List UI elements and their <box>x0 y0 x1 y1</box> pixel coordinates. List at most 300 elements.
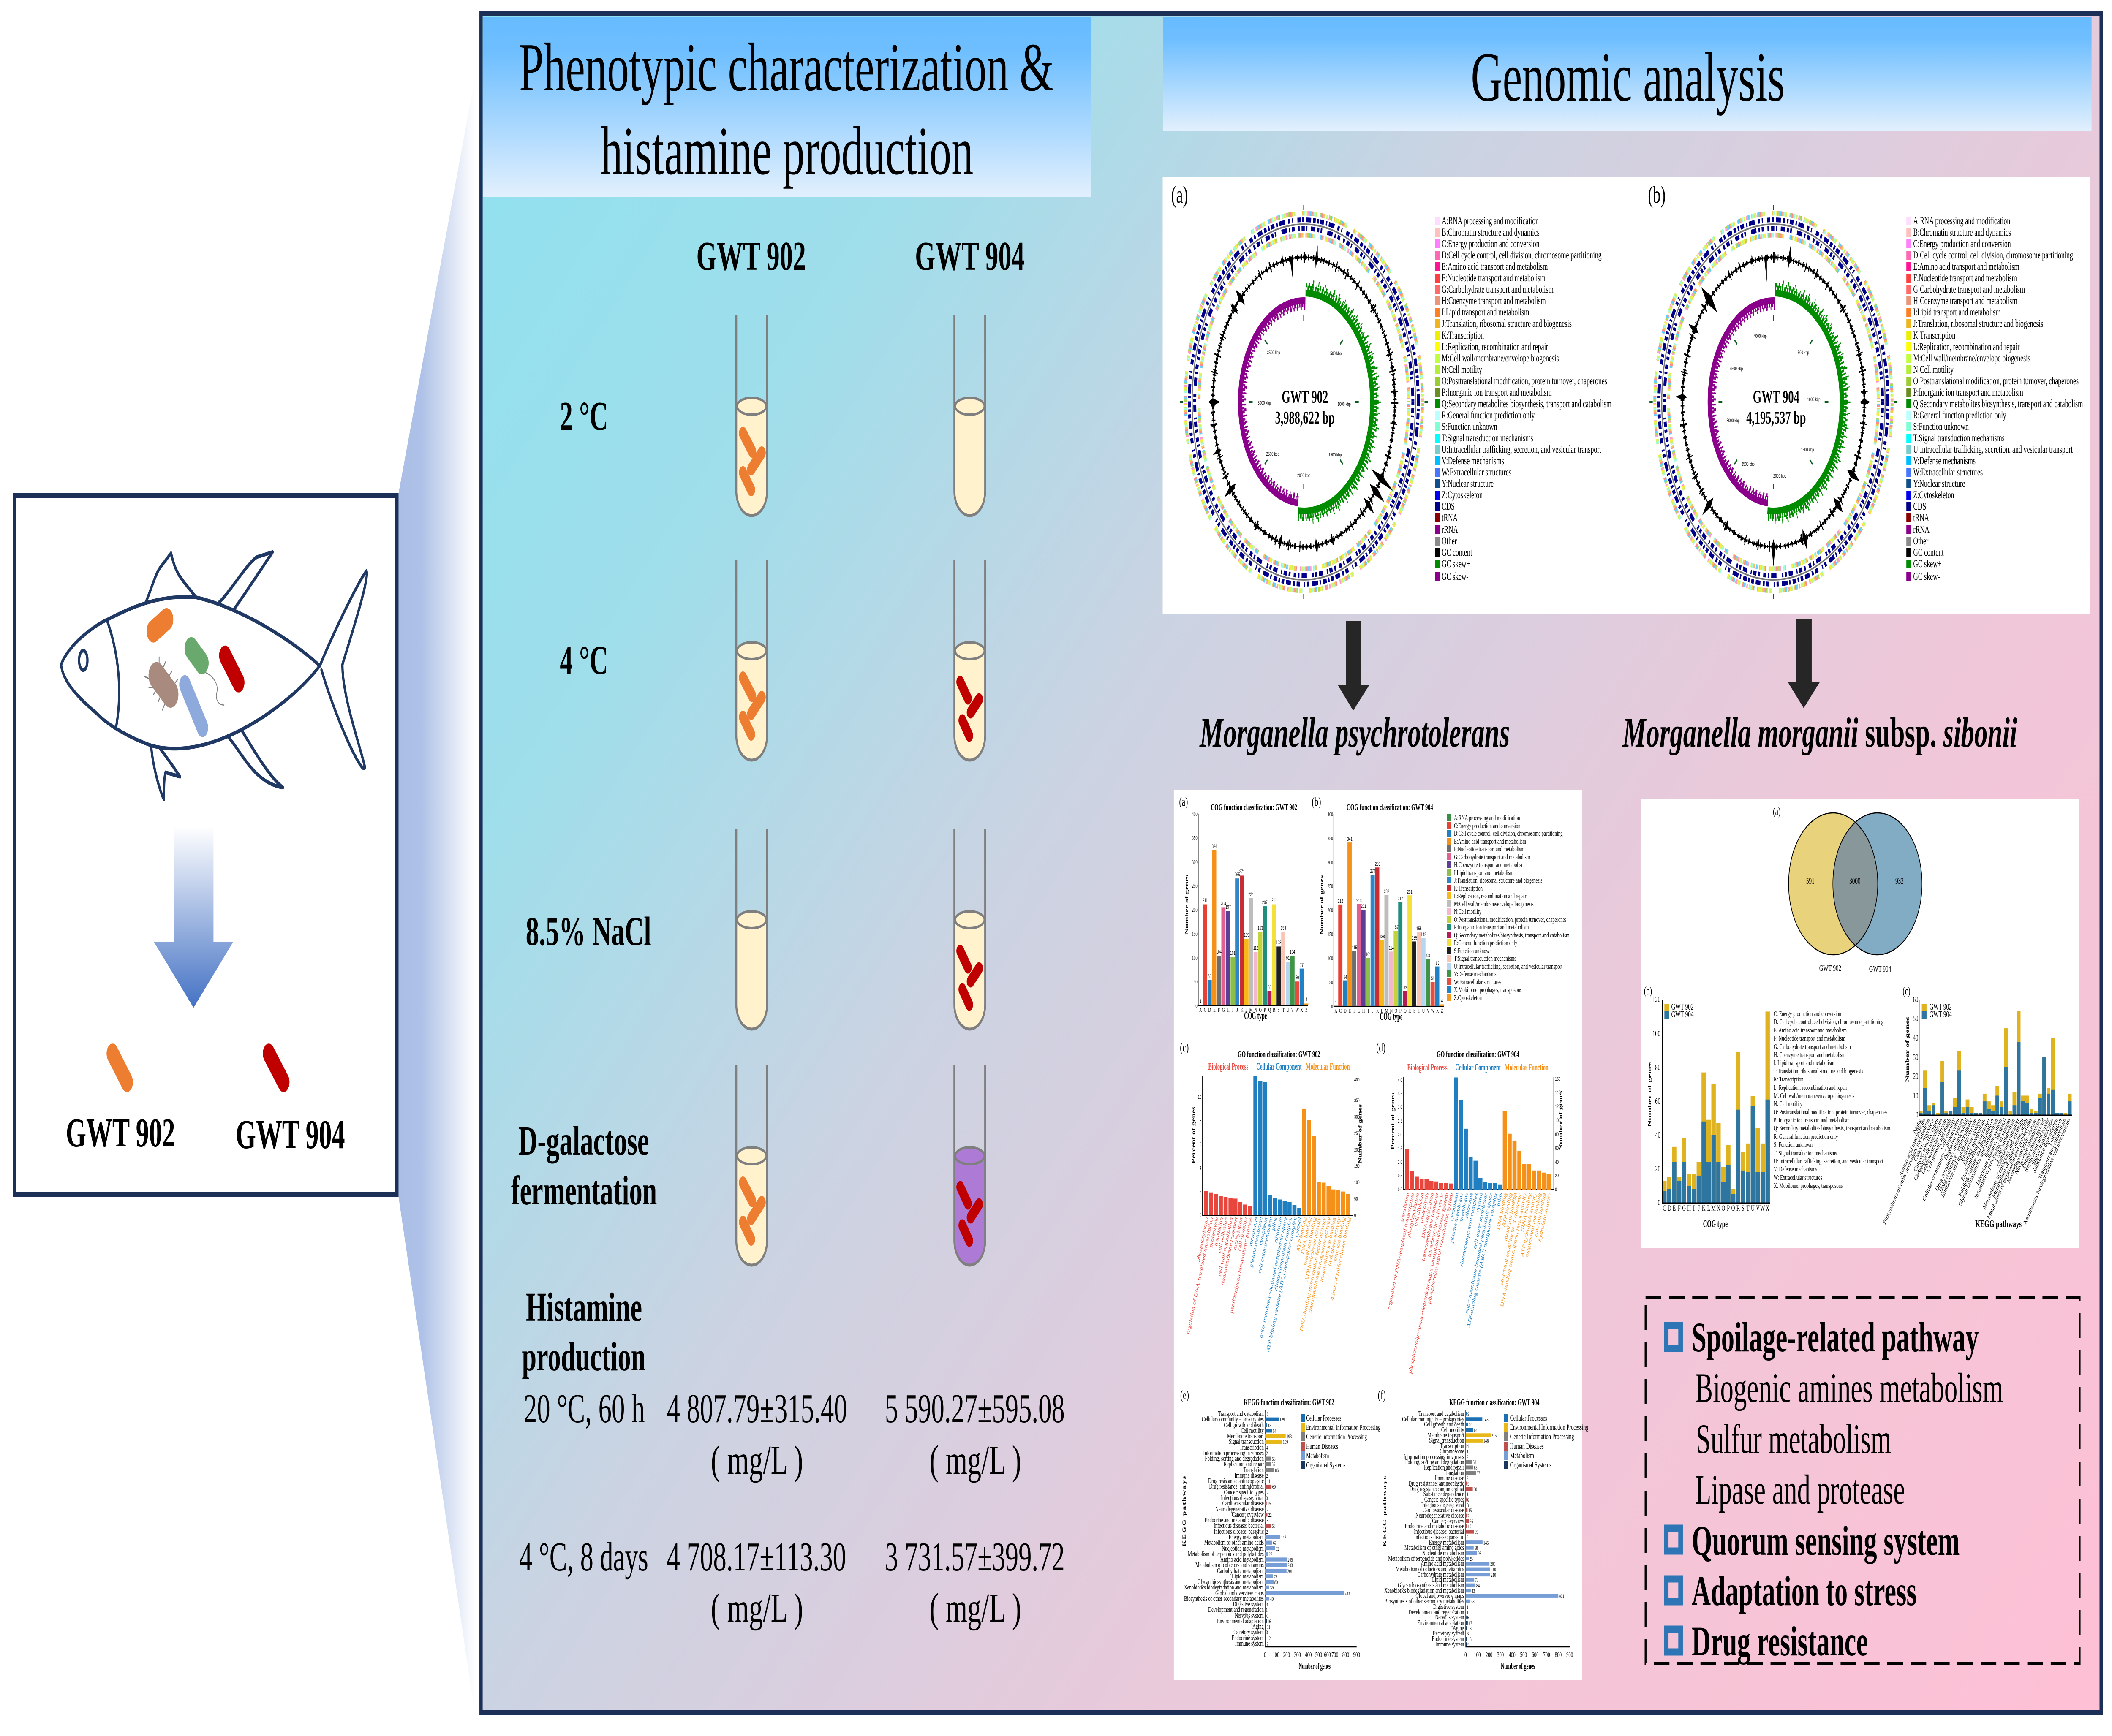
chart d: GO GWT 904: GO function classification: GWT 904 <box>1437 1049 1519 1059</box>
chart a: COG GWT 902: I <box>1232 1007 1233 1013</box>
chart a: COG GWT 902: 204 <box>1221 901 1226 907</box>
row 1 test tubes <box>736 315 985 516</box>
chart f: KEGG GWT 904: 1 <box>1467 1604 1468 1611</box>
chart b: COG GWT 904: X <box>1436 1008 1439 1014</box>
chart: GWT 904 genome circle: GWT 904 <box>1753 387 1799 407</box>
histamine production table: 3 731.57±399.72 <box>885 1534 1065 1580</box>
chart c: KEGG stacked bars: Neurodegenerative disease <box>2006 1117 2037 1185</box>
chart b: COG GWT 904: K <box>1376 1008 1379 1014</box>
chart c: GO GWT 902: 100 <box>1354 1180 1360 1186</box>
chart f: KEGG GWT 904: Genetic Information Processing <box>1510 1432 1574 1441</box>
chart e: KEGG GWT 902: 203 <box>1287 1562 1293 1569</box>
chart f: KEGG GWT 904: Cell motility <box>1441 1426 1464 1434</box>
chart e: KEGG GWT 902: Replication and repair <box>1224 1460 1264 1468</box>
chart c: KEGG stacked bars: Cell growth and death <box>1925 1117 1952 1174</box>
chart b: COG stacked bars: S: Function unknown <box>1774 1141 1813 1149</box>
chart d: GO GWT 904: 2.5 <box>1398 1119 1402 1125</box>
chart d: GO GWT 904: ATP-binding cassette (ABC) transporter complex <box>1466 1192 1498 1329</box>
chart f: KEGG GWT 904: Membrane transport <box>1427 1432 1464 1440</box>
chart f: KEGG GWT 904: Excretory system <box>1433 1630 1464 1638</box>
legend: GWT 902 genome circle: E:Amino acid transport and metabolism <box>1442 260 1548 272</box>
chart: GWT 904 genome circle: 4000 kbp <box>1754 334 1767 340</box>
species label: Morganella morganii subsp. sibonii: Morganella morganii subsp. sibonii <box>1622 710 2017 756</box>
chart d: GO GWT 904: proteolysis <box>1419 1191 1430 1224</box>
chart c: KEGG stacked bars: Cellular community – prokaryotes <box>1921 1116 1961 1203</box>
chart b: COG GWT 904: T <box>1418 1008 1420 1014</box>
chart a: COG GWT 902: N <box>1255 1007 1257 1013</box>
chart a: Venn diagram: 591 <box>1806 876 1815 886</box>
chart f: KEGG GWT 904: 900 <box>1566 1651 1573 1659</box>
chart a: COG GWT 902: 250 <box>1192 883 1198 889</box>
chart f: KEGG GWT 904: Lipid metabolism <box>1432 1576 1464 1584</box>
chart d: GO GWT 904: Number of genes <box>1558 1090 1564 1150</box>
chart d: GO GWT 904: plasma membrane <box>1449 1192 1464 1244</box>
chart a: COG GWT 902: K <box>1241 1007 1244 1013</box>
chart b: COG stacked bars: U: Intracellular trafficking, secretion, and vesicular transport <box>1774 1157 1883 1165</box>
legend: COG categories: I:Lipid transport and metabolism <box>1454 869 1513 877</box>
chart d: GO GWT 904: structural constituent of ribosome <box>1499 1192 1523 1286</box>
chart b: COG stacked bars: P: Inorganic ion transport and metabolism <box>1774 1117 1850 1125</box>
row 4 test tubes <box>736 1065 985 1265</box>
chart a: COG GWT 902: COG type <box>1244 1011 1267 1021</box>
chart a: COG GWT 902: H <box>1227 1007 1230 1013</box>
legend: GWT 904 genome circle: G:Carbohydrate transport and metabolism <box>1913 283 2025 295</box>
chart c: GO GWT 902: pilus <box>1271 1216 1278 1232</box>
chart b: COG GWT 904: COG function classification: GWT 904 <box>1347 802 1433 812</box>
chart c: GO GWT 902: 0 <box>1200 1213 1202 1219</box>
chart a: COG GWT 902: 197 <box>1225 905 1231 910</box>
chart f: KEGG GWT 904: 68 <box>1475 1545 1478 1551</box>
chart b: COG stacked bars: V: Defense mechanisms <box>1774 1165 1817 1174</box>
chart e: KEGG GWT 902: 56 <box>1272 1456 1276 1462</box>
chart b: COG GWT 904: 341 <box>1347 837 1353 842</box>
chart c: KEGG stacked bars: 40 <box>1913 1033 1918 1043</box>
chart c: KEGG stacked bars: Information processing in viruses <box>1974 1116 2012 1201</box>
chart b: COG GWT 904: COG type <box>1380 1011 1402 1022</box>
chart b: COG GWT 904: 300 <box>1328 859 1333 866</box>
chart f: KEGG GWT 904: Cellular community – prokaryotes <box>1402 1415 1464 1424</box>
chart c: KEGG stacked bars: Immune system <box>1983 1117 2003 1159</box>
chart b: COG GWT 904: P <box>1399 1008 1402 1014</box>
histamine production table <box>519 1284 1065 1631</box>
chart c: GO GWT 902: cytosol <box>1294 1216 1303 1238</box>
chart b: COG GWT 904: 274 <box>1370 869 1376 875</box>
legend: COG categories: L:Replication, recombination and repair <box>1454 892 1527 900</box>
chart a: COG GWT 902: S <box>1278 1007 1279 1013</box>
main panel background <box>481 14 2101 1712</box>
chart f: KEGG GWT 904: 13 <box>1468 1636 1472 1643</box>
chart b: COG GWT 904: 115 <box>1352 945 1357 951</box>
chart a: COG GWT 902: 104 <box>1216 949 1222 955</box>
legend: GWT 904 genome circle: K:Transcription <box>1913 329 1956 341</box>
legend: GWT 904 genome circle: L:Replication, recombination and repair <box>1913 340 2019 353</box>
chart b: COG stacked bars: V <box>1756 1204 1760 1213</box>
chart f: KEGG GWT 904: Neurodegenerative disease <box>1415 1512 1464 1520</box>
chart f: KEGG GWT 904: 3 <box>1467 1631 1469 1637</box>
chart a: COG GWT 902: U <box>1287 1007 1290 1013</box>
chart e: KEGG GWT 902: 67 <box>1273 1540 1276 1546</box>
chart b: COG stacked bars: R: General function prediction only <box>1774 1133 1838 1141</box>
chart b: COG stacked bars <box>1644 985 1890 1230</box>
chart b: COG stacked bars: D: Cell cycle control, cell division, chromosome partitioning <box>1774 1018 1883 1026</box>
chart c: KEGG stacked bars: Cancer: specific types <box>1913 1117 1939 1174</box>
chart c: GO GWT 902 <box>1180 1041 1363 1353</box>
chart b: COG stacked bars: 80 <box>1655 1062 1660 1072</box>
chart f: KEGG GWT 904: 143 <box>1483 1417 1489 1423</box>
chart b: COG stacked bars: 0 <box>1658 1198 1660 1207</box>
chart e: KEGG GWT 902: 22 <box>1268 1512 1272 1519</box>
chart c: KEGG stacked bars: 0 <box>1916 1110 1918 1119</box>
chart b: COG GWT 904: O <box>1394 1008 1397 1014</box>
legend: COG categories: T:Signal transduction mechanisms <box>1454 955 1516 963</box>
chart e: KEGG GWT 902: Infectious disease: bacterial <box>1214 1522 1264 1530</box>
chart c: KEGG stacked bars: 10 <box>1913 1091 1918 1100</box>
legend: GWT 904 genome circle: CDS <box>1913 500 1926 512</box>
chart b: COG stacked bars: K <box>1702 1204 1706 1213</box>
panel letter b: (b) <box>1648 182 1666 208</box>
chart c: GO GWT 902: 200 <box>1354 1147 1360 1153</box>
legend: GWT 902 genome circle: U:Intracellular trafficking, secretion, and vesicular transport <box>1442 443 1601 455</box>
chart d: GO GWT 904: rRNA binding <box>1520 1192 1532 1233</box>
legend: GWT 902 genome circle: tRNA <box>1442 511 1458 524</box>
list of pathways: Quorum sensing system <box>1692 1518 1960 1565</box>
chart b: COG stacked bars: I <box>1693 1204 1695 1213</box>
chart: GWT 904 genome circle: 1500 kbp <box>1801 447 1814 453</box>
chart e: KEGG GWT 902: 700 <box>1331 1651 1338 1659</box>
chart b: COG GWT 904: W <box>1431 1008 1435 1014</box>
column heading: GWT 904: GWT 904 <box>915 233 1025 279</box>
chart e: KEGG GWT 902: (e) <box>1180 1388 1189 1402</box>
chart a: Venn diagram: GWT 902 <box>1819 963 1841 973</box>
chart b: COG GWT 904: 213 <box>1356 898 1362 904</box>
chart c: KEGG stacked bars: Cell motility <box>1939 1116 1957 1151</box>
chart e: KEGG GWT 902: Cell growth and death <box>1224 1421 1264 1429</box>
chart d: GO GWT 904: Biological Process <box>1407 1062 1448 1073</box>
chart f: KEGG GWT 904: 9 <box>1467 1642 1469 1648</box>
chart a: COG GWT 902: P <box>1264 1007 1266 1013</box>
chart e: KEGG GWT 902: Transport and catabolism <box>1218 1410 1264 1418</box>
chart e: KEGG GWT 902: Biosynthesis of other secondary metabolites <box>1184 1595 1264 1603</box>
chart f: KEGG GWT 904: 145 <box>1483 1540 1489 1546</box>
row label: 4 degrees: 4 °C <box>560 637 608 683</box>
chart b: COG GWT 904: 51 <box>1431 976 1434 982</box>
chart b: COG GWT 904: 150 <box>1328 931 1333 938</box>
chart d: GO GWT 904: 3.0 <box>1398 1105 1402 1111</box>
chart f: KEGG GWT 904: 38 <box>1471 1599 1475 1605</box>
chart f: KEGG GWT 904: 69 <box>1475 1529 1478 1535</box>
list of pathways: Adaptation to stress <box>1692 1568 1917 1615</box>
legend: GWT 904 genome circle: GC skew- <box>1913 570 1940 582</box>
chart f: KEGG GWT 904: 400 <box>1509 1651 1516 1659</box>
chart d: GO GWT 904: 0.5 <box>1398 1173 1402 1179</box>
chart e: KEGG GWT 902: Endocrine system <box>1232 1634 1264 1642</box>
chart e: KEGG GWT 902: Metabolism of terpenoids and polyketides <box>1188 1550 1264 1558</box>
chart e: KEGG GWT 902: 1 <box>1266 1607 1268 1614</box>
chart b: COG stacked bars: F: Nucleotide transport and metabolism <box>1774 1035 1845 1043</box>
heading: phenotypic characterization <box>483 17 1091 197</box>
chart a: COG GWT 902: 211 <box>1203 898 1208 904</box>
legend: GWT 904 genome circle: N:Cell motility <box>1913 363 1954 375</box>
chart b: COG GWT 904: C <box>1339 1008 1342 1014</box>
chart a: COG GWT 902: Number of genes <box>1184 875 1189 935</box>
chart f: KEGG GWT 904: 6 <box>1467 1615 1469 1621</box>
chart: GWT 902 genome circle: 3500 kbp <box>1267 350 1280 356</box>
chart d: GO GWT 904: regulation of DNA-templated transcription <box>1386 1192 1415 1311</box>
chart f: KEGG GWT 904: 20 <box>1469 1422 1472 1428</box>
chart f: KEGG GWT 904: 205 <box>1490 1561 1496 1568</box>
chart c: KEGG stacked bars: Cardiovascular disease <box>1920 1117 1948 1176</box>
chart b: COG GWT 904: S <box>1413 1008 1415 1014</box>
chart f: KEGG GWT 904: Amino acid metabolism <box>1421 1560 1464 1568</box>
legend: COG categories: W:Extracellular structures <box>1454 978 1501 986</box>
chart e: KEGG GWT 902: Energy metabolism <box>1229 1533 1264 1541</box>
chart c: GO GWT 902: hydrolase activity <box>1327 1216 1342 1267</box>
chart b: COG GWT 904: 101 <box>1366 952 1371 958</box>
chart c: KEGG stacked bars: Digestive system <box>1943 1117 1965 1162</box>
chart f: KEGG GWT 904: 17 <box>1469 1620 1472 1627</box>
chart d: GO GWT 904: phosphoenolpyruvate-dependent sugar phosphotransferase system <box>1408 1192 1449 1375</box>
legend: GWT 904 genome circle: Z:Cytoskeleton <box>1913 489 1954 501</box>
legend: COG categories: M:Cell wall/membrane/envelope biogenesis <box>1454 900 1534 908</box>
chart: GWT 904 genome circle: 500 kbp <box>1798 350 1809 356</box>
chart b: COG GWT 904 <box>1312 795 1444 1022</box>
legend: GWT 904 genome circle: GC skew+ <box>1913 557 1941 570</box>
chart: GWT 902 genome circle: 1500 kbp <box>1328 452 1342 458</box>
chart f: KEGG GWT 904: 146 <box>1483 1438 1489 1444</box>
legend: COG categories: Q:Secondary metabolites biosynthesis, transport and catabolism <box>1454 932 1569 940</box>
legend: GWT 904 genome circle: A:RNA processing and modification <box>1913 215 2011 227</box>
chart f: KEGG GWT 904: Immune system <box>1435 1641 1464 1649</box>
chart c: GO GWT 902: cell outer membrane <box>1257 1216 1274 1274</box>
chart f: KEGG GWT 904: 215 <box>1491 1433 1497 1439</box>
chart e: KEGG GWT 902: Excretory system <box>1232 1628 1264 1636</box>
chart b: COG GWT 904: N <box>1390 1008 1393 1014</box>
chart c: GO GWT 902: 250 <box>1354 1131 1360 1137</box>
chart d: GO GWT 904: ATP hydrolysis activity <box>1519 1191 1538 1258</box>
chart f: KEGG GWT 904: 98 <box>1478 1551 1481 1557</box>
chart a: Venn diagram: 932 <box>1895 876 1904 886</box>
chart: GWT 904 genome circle: 4,195,537 bp <box>1746 408 1806 428</box>
chart f: KEGG GWT 904: 2 <box>1467 1535 1468 1541</box>
chart e: KEGG GWT 902: 400 <box>1305 1651 1312 1659</box>
chart e: KEGG GWT 902: 142 <box>1281 1535 1286 1541</box>
chart e: KEGG GWT 902: Translation <box>1244 1466 1264 1474</box>
list of pathways: Drug resistance <box>1692 1619 1868 1665</box>
chart d: GO GWT 904 <box>1376 1041 1564 1375</box>
chart d: GO GWT 904: ribosome <box>1464 1192 1474 1220</box>
chart c: KEGG stacked bars: 20 <box>1913 1071 1918 1081</box>
chart e: KEGG GWT 902: Human Diseases <box>1306 1443 1338 1451</box>
chart d: GO GWT 904: 1.5 <box>1398 1146 1402 1152</box>
chart c: KEGG stacked bars: Transport and catabolism <box>2037 1117 2067 1181</box>
histamine production table: 5 590.27±595.08 <box>885 1386 1065 1432</box>
chart c: GO GWT 902: 400 <box>1354 1077 1360 1083</box>
chart f: KEGG GWT 904: Metabolism <box>1510 1451 1534 1460</box>
legend: GWT 902 genome circle: CDS <box>1442 500 1455 512</box>
chart a: Venn diagram: GWT 904 <box>1869 964 1892 974</box>
chart e: KEGG GWT 902: Cancer: overview <box>1232 1511 1264 1519</box>
chart a: COG GWT 902: O <box>1259 1007 1262 1013</box>
histamine production table: production <box>522 1334 645 1380</box>
chart e: KEGG GWT 902: 8 <box>1267 1518 1268 1524</box>
chart e: KEGG GWT 902: 15 <box>1268 1501 1271 1507</box>
chart e: KEGG GWT 902: 16 <box>1268 1619 1271 1625</box>
legend: GWT 902 genome circle: S:Function unknown <box>1442 420 1497 432</box>
chart d: GO GWT 904: zinc ion binding <box>1533 1192 1547 1239</box>
chart a: COG GWT 902: X <box>1300 1007 1303 1013</box>
chart b: COG stacked bars: X <box>1766 1204 1769 1213</box>
chart: GWT 904 genome circle: 3500 kbp <box>1730 366 1743 372</box>
chart e: KEGG GWT 902: 500 <box>1315 1651 1322 1659</box>
chart e: KEGG GWT 902: 8 <box>1267 1411 1268 1418</box>
chart c: KEGG stacked bars: Folding, sorting and degradation <box>1957 1117 1995 1199</box>
chart f: KEGG GWT 904: Human Diseases <box>1510 1442 1544 1451</box>
chart b: COG stacked bars: (b) <box>1644 985 1652 997</box>
chart f: KEGG GWT 904: 700 <box>1543 1651 1550 1659</box>
legend: GWT 904 genome circle: D:Cell cycle control, cell division, chromosome partitioning <box>1913 249 2073 261</box>
legend: COG categories: S:Function unknown <box>1454 947 1491 955</box>
chart f: KEGG GWT 904: Environmental Information Processing <box>1510 1423 1588 1432</box>
label: GWT 902 strain: GWT 902 <box>66 1110 175 1156</box>
chart b: COG stacked bars: E: Amino acid transport and metabolism <box>1774 1027 1847 1035</box>
heading: genomic analysis: Genomic analysis <box>1471 38 1785 116</box>
chart f: KEGG GWT 904: Nervous system <box>1435 1614 1464 1622</box>
chart e: KEGG GWT 902: KEGG pathways <box>1181 1476 1187 1546</box>
chart f: KEGG GWT 904: Carbohydrate metabolism <box>1418 1571 1464 1579</box>
chart e: KEGG GWT 902: 900 <box>1353 1651 1360 1659</box>
chart b: COG stacked bars: COG type <box>1703 1219 1728 1230</box>
chart b: COG GWT 904: 232 <box>1384 889 1389 895</box>
chart f: KEGG GWT 904: Transcription <box>1440 1442 1464 1450</box>
chart e: KEGG GWT 902: Metabolism <box>1306 1452 1329 1460</box>
chart a: COG GWT 902: A <box>1199 1007 1202 1013</box>
legend: GWT 904 genome circle: E:Amino acid transport and metabolism <box>1913 260 2019 272</box>
chart f: KEGG GWT 904: 73 <box>1475 1577 1478 1584</box>
legend: GWT 902 genome circle: O:Posttranslational modification, protein turnover, chaperones <box>1442 375 1607 387</box>
panel: functional classification charts <box>1174 790 1588 1680</box>
chart b: COG stacked bars: 100 <box>1652 1029 1660 1038</box>
chart c: KEGG stacked bars: KEGG pathways <box>1975 1219 2022 1230</box>
legend: GWT 902 genome circle: N:Cell motility <box>1442 363 1482 375</box>
chart c: GO GWT 902: proteolysis <box>1208 1216 1219 1248</box>
list of pathways: Lipase and protease <box>1695 1467 1905 1513</box>
legend: COG categories: C:Energy production and conversion <box>1454 822 1520 830</box>
chart f: KEGG GWT 904: Nucleotide metabolism <box>1422 1549 1464 1557</box>
chart f: KEGG GWT 904: 1 <box>1467 1491 1468 1498</box>
chart: GWT 902 genome circle: 500 kbp <box>1330 351 1342 357</box>
chart b: COG GWT 904: 54 <box>1343 975 1347 981</box>
chart e: KEGG GWT 902: 92 <box>1276 1546 1279 1552</box>
legend: GWT 904 genome circle: I:Lipid transport and metabolism <box>1913 306 2001 318</box>
chart a: COG GWT 902: 4 <box>1306 997 1307 1003</box>
chart c: KEGG stacked bars: Cancer: overview <box>1913 1116 1935 1163</box>
legend: GWT 902 genome circle <box>1435 215 1611 582</box>
chart f: KEGG GWT 904: Cancer: overview <box>1432 1517 1464 1525</box>
chart b: COG stacked bars: I: Lipid transport and metabolism <box>1774 1059 1834 1067</box>
chart d: GO GWT 904: 100 <box>1555 1118 1560 1124</box>
chart: GWT 902 genome circle: GWT 902 <box>1282 387 1328 407</box>
chart a: COG GWT 902: 400 <box>1192 811 1198 818</box>
chart b: COG GWT 904: 217 <box>1398 896 1403 902</box>
chart a: COG GWT 902: C <box>1204 1007 1206 1013</box>
legend: GWT 904 genome circle: S:Function unknown <box>1913 420 1969 432</box>
chart a: COG GWT 902: Z <box>1305 1007 1308 1013</box>
histamine production table: Histamine <box>526 1284 642 1330</box>
chart f: KEGG GWT 904: Metabolism of cofactors and vitamins <box>1396 1565 1464 1573</box>
legend: COG categories: X:Mobilome: prophages, transposons <box>1454 986 1522 994</box>
chart b: COG stacked bars: M <box>1711 1204 1716 1213</box>
chart e: KEGG GWT 902: Development and regeneration <box>1208 1606 1264 1614</box>
chart b: COG GWT 904: 201 <box>1361 904 1366 910</box>
chart b: COG GWT 904: 100 <box>1328 955 1333 962</box>
chart c: GO GWT 902: 50 <box>1354 1196 1358 1202</box>
chart b: COG stacked bars: M: Cell wall/membrane/envelope biogenesis <box>1774 1092 1855 1100</box>
chart e: KEGG GWT 902: Cancer: specific types <box>1224 1489 1264 1497</box>
chart a: COG GWT 902: J <box>1236 1007 1238 1013</box>
chart d: GO GWT 904: (d) <box>1376 1041 1385 1054</box>
chart f: KEGG GWT 904: 600 <box>1532 1651 1538 1659</box>
chart b: COG GWT 904: 83 <box>1436 961 1440 967</box>
chart f: KEGG GWT 904: 200 <box>1486 1651 1492 1659</box>
chart d: GO GWT 904: 80 <box>1555 1132 1559 1138</box>
chart d: GO GWT 904: Molecular Function <box>1505 1062 1549 1073</box>
legend: GWT 904 genome circle: Other <box>1913 535 1928 547</box>
chart b: COG stacked bars: Q: Secondary metabolites biosynthesis, transport and catabolism <box>1774 1125 1890 1133</box>
chart e: KEGG GWT 902: Membrane transport <box>1227 1432 1264 1440</box>
chart c: KEGG stacked bars: Number of genes <box>1905 1017 1910 1082</box>
chart e: KEGG GWT 902: 39 <box>1270 1585 1274 1591</box>
legend: GWT 902 genome circle: K:Transcription <box>1442 329 1484 341</box>
chart b: COG stacked bars: C <box>1663 1204 1666 1213</box>
chart b: COG GWT 904: 50 <box>1329 979 1333 986</box>
chart e: KEGG GWT 902: 12 <box>1267 1635 1271 1642</box>
chart b: COG GWT 904: 157 <box>1393 925 1399 931</box>
chart e: KEGG GWT 902: 3 <box>1266 1602 1268 1608</box>
chart a: COG GWT 902: 100 <box>1192 955 1198 962</box>
chart b: COG stacked bars: L: Replication, recombination and repair <box>1774 1084 1847 1092</box>
chart f: KEGG GWT 904: Infectious disease: parasitic <box>1414 1533 1464 1541</box>
chart e: KEGG GWT 902: 2 <box>1266 1529 1268 1535</box>
legend: GWT 904 genome circle: rRNA <box>1913 523 1930 535</box>
chart a: COG GWT 902: G <box>1222 1007 1225 1013</box>
chart f: KEGG GWT 904: 63 <box>1474 1465 1477 1471</box>
chart e: KEGG GWT 902: Xenobiotics biodegradation and metabolism <box>1184 1584 1264 1592</box>
row label: D-galactose fermentation: D-galactose <box>518 1118 649 1164</box>
chart e: KEGG GWT 902: 64 <box>1273 1428 1276 1434</box>
chart c: GO GWT 902: Percent of genes <box>1191 1106 1196 1164</box>
legend: GWT 904 genome circle: tRNA <box>1913 511 1929 524</box>
chart c: GO GWT 902: methylation <box>1232 1216 1244 1251</box>
chart f: KEGG GWT 904: KEGG pathways <box>1382 1476 1387 1546</box>
chart a: COG GWT 902: 271 <box>1239 869 1245 875</box>
chart c: GO GWT 902: ribonucleoprotein complex <box>1273 1216 1293 1292</box>
chart: GWT 904 genome circle: 2500 kbp <box>1742 462 1755 467</box>
chart: GWT 902 genome circle: 1000 kbp <box>1338 402 1351 408</box>
chart f: KEGG GWT 904: 13 <box>1468 1626 1472 1632</box>
chart f: KEGG GWT 904: 3 <box>1467 1502 1469 1509</box>
chart e: KEGG GWT 902: 129 <box>1280 1417 1285 1423</box>
chart f: KEGG GWT 904: 2 <box>1467 1454 1468 1461</box>
chart b: COG GWT 904: I <box>1368 1008 1369 1014</box>
chart b: COG GWT 904: Number of genes <box>1319 875 1325 935</box>
chart: GWT 904 genome circle <box>1649 205 1897 599</box>
chart b: COG stacked bars: L <box>1707 1204 1710 1213</box>
chart c: KEGG stacked bars: Membrane transport <box>1995 1117 2020 1169</box>
chart a: COG GWT 902: 53 <box>1208 974 1211 980</box>
chart e: KEGG GWT 902: Amino acid metabolism <box>1220 1556 1264 1564</box>
chart c: GO GWT 902: 350 <box>1354 1098 1360 1104</box>
chart a: COG GWT 902: 112 <box>1253 945 1258 951</box>
